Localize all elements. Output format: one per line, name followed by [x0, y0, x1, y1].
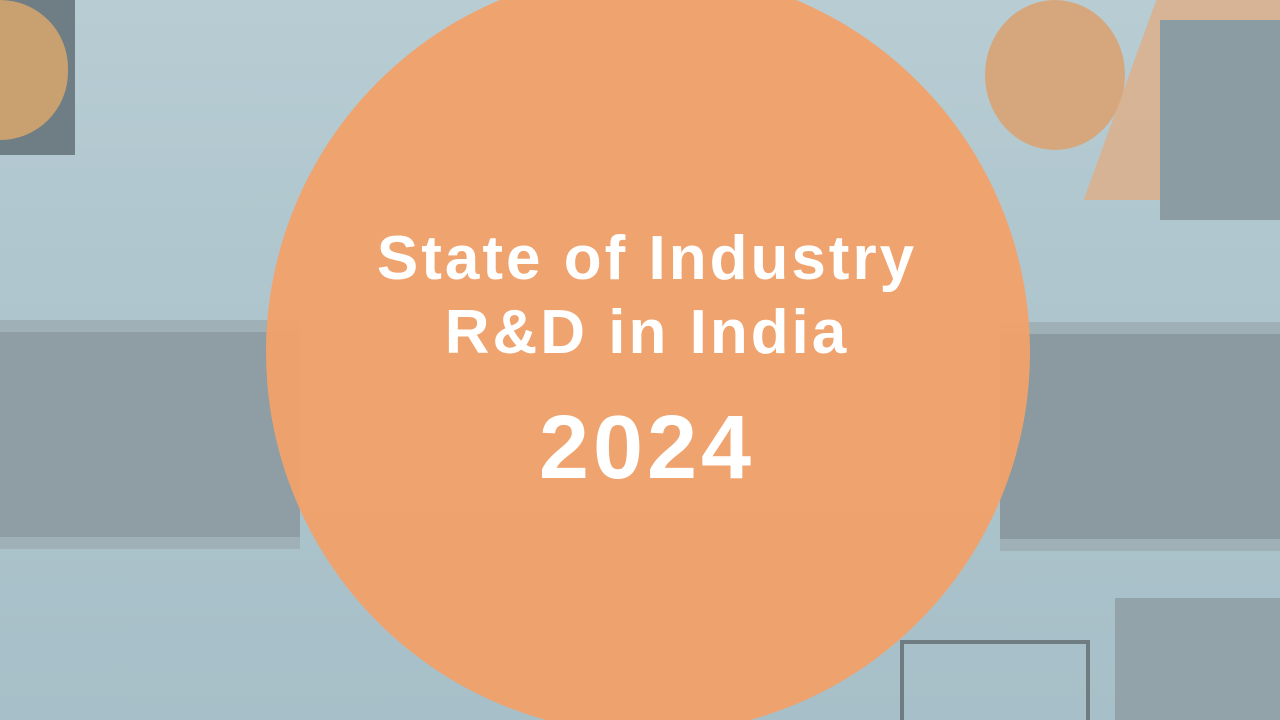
year: 2024 — [539, 398, 755, 498]
conveyor belt left — [0, 320, 300, 549]
machine top left — [0, 0, 75, 155]
grating bottom right — [1115, 598, 1280, 720]
conveyor belt right — [1000, 322, 1280, 551]
title: R&D in India — [445, 298, 849, 367]
orange circle — [266, 0, 1030, 720]
title: State of Industry — [377, 224, 917, 293]
title — [377, 224, 917, 367]
robot arm top right — [985, 0, 1125, 150]
